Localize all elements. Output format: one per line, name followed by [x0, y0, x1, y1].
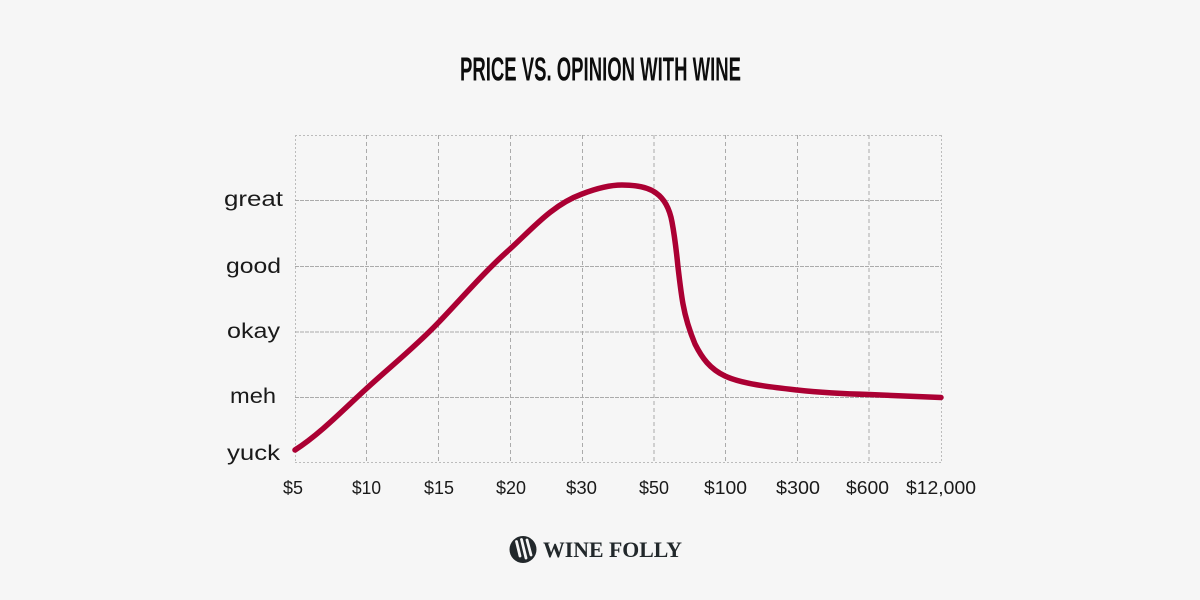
x-axis labels: $100 — [704, 478, 747, 498]
y-axis labels: great — [224, 188, 283, 211]
x-axis labels: $10 — [352, 478, 381, 498]
x-axis labels: $600 — [846, 478, 889, 498]
x-axis labels: $300 — [776, 478, 820, 498]
opinion curve — [295, 185, 941, 450]
y-axis labels — [224, 188, 283, 465]
x-axis labels: $5 — [283, 478, 303, 498]
title: PRICE VS. OPINION WITH WINE — [460, 50, 741, 88]
x-axis labels: $15 — [424, 478, 454, 498]
y-axis labels: meh — [230, 385, 276, 408]
wordmark: WINE FOLLY — [543, 537, 682, 562]
y-axis labels: yuck — [227, 442, 281, 465]
x-axis labels: $50 — [639, 478, 669, 498]
x-axis labels — [283, 478, 976, 498]
chart: price vs opinion — [224, 135, 976, 498]
icon: wine bottles badge — [510, 536, 536, 563]
y-axis labels: good — [226, 255, 281, 278]
logo: Wine Folly — [510, 536, 682, 563]
y-axis labels: okay — [227, 320, 281, 343]
x-axis labels: $12,000 — [906, 478, 976, 498]
x-axis labels: $20 — [496, 478, 526, 498]
chart grid — [295, 135, 942, 463]
x-axis labels: $30 — [566, 478, 597, 498]
